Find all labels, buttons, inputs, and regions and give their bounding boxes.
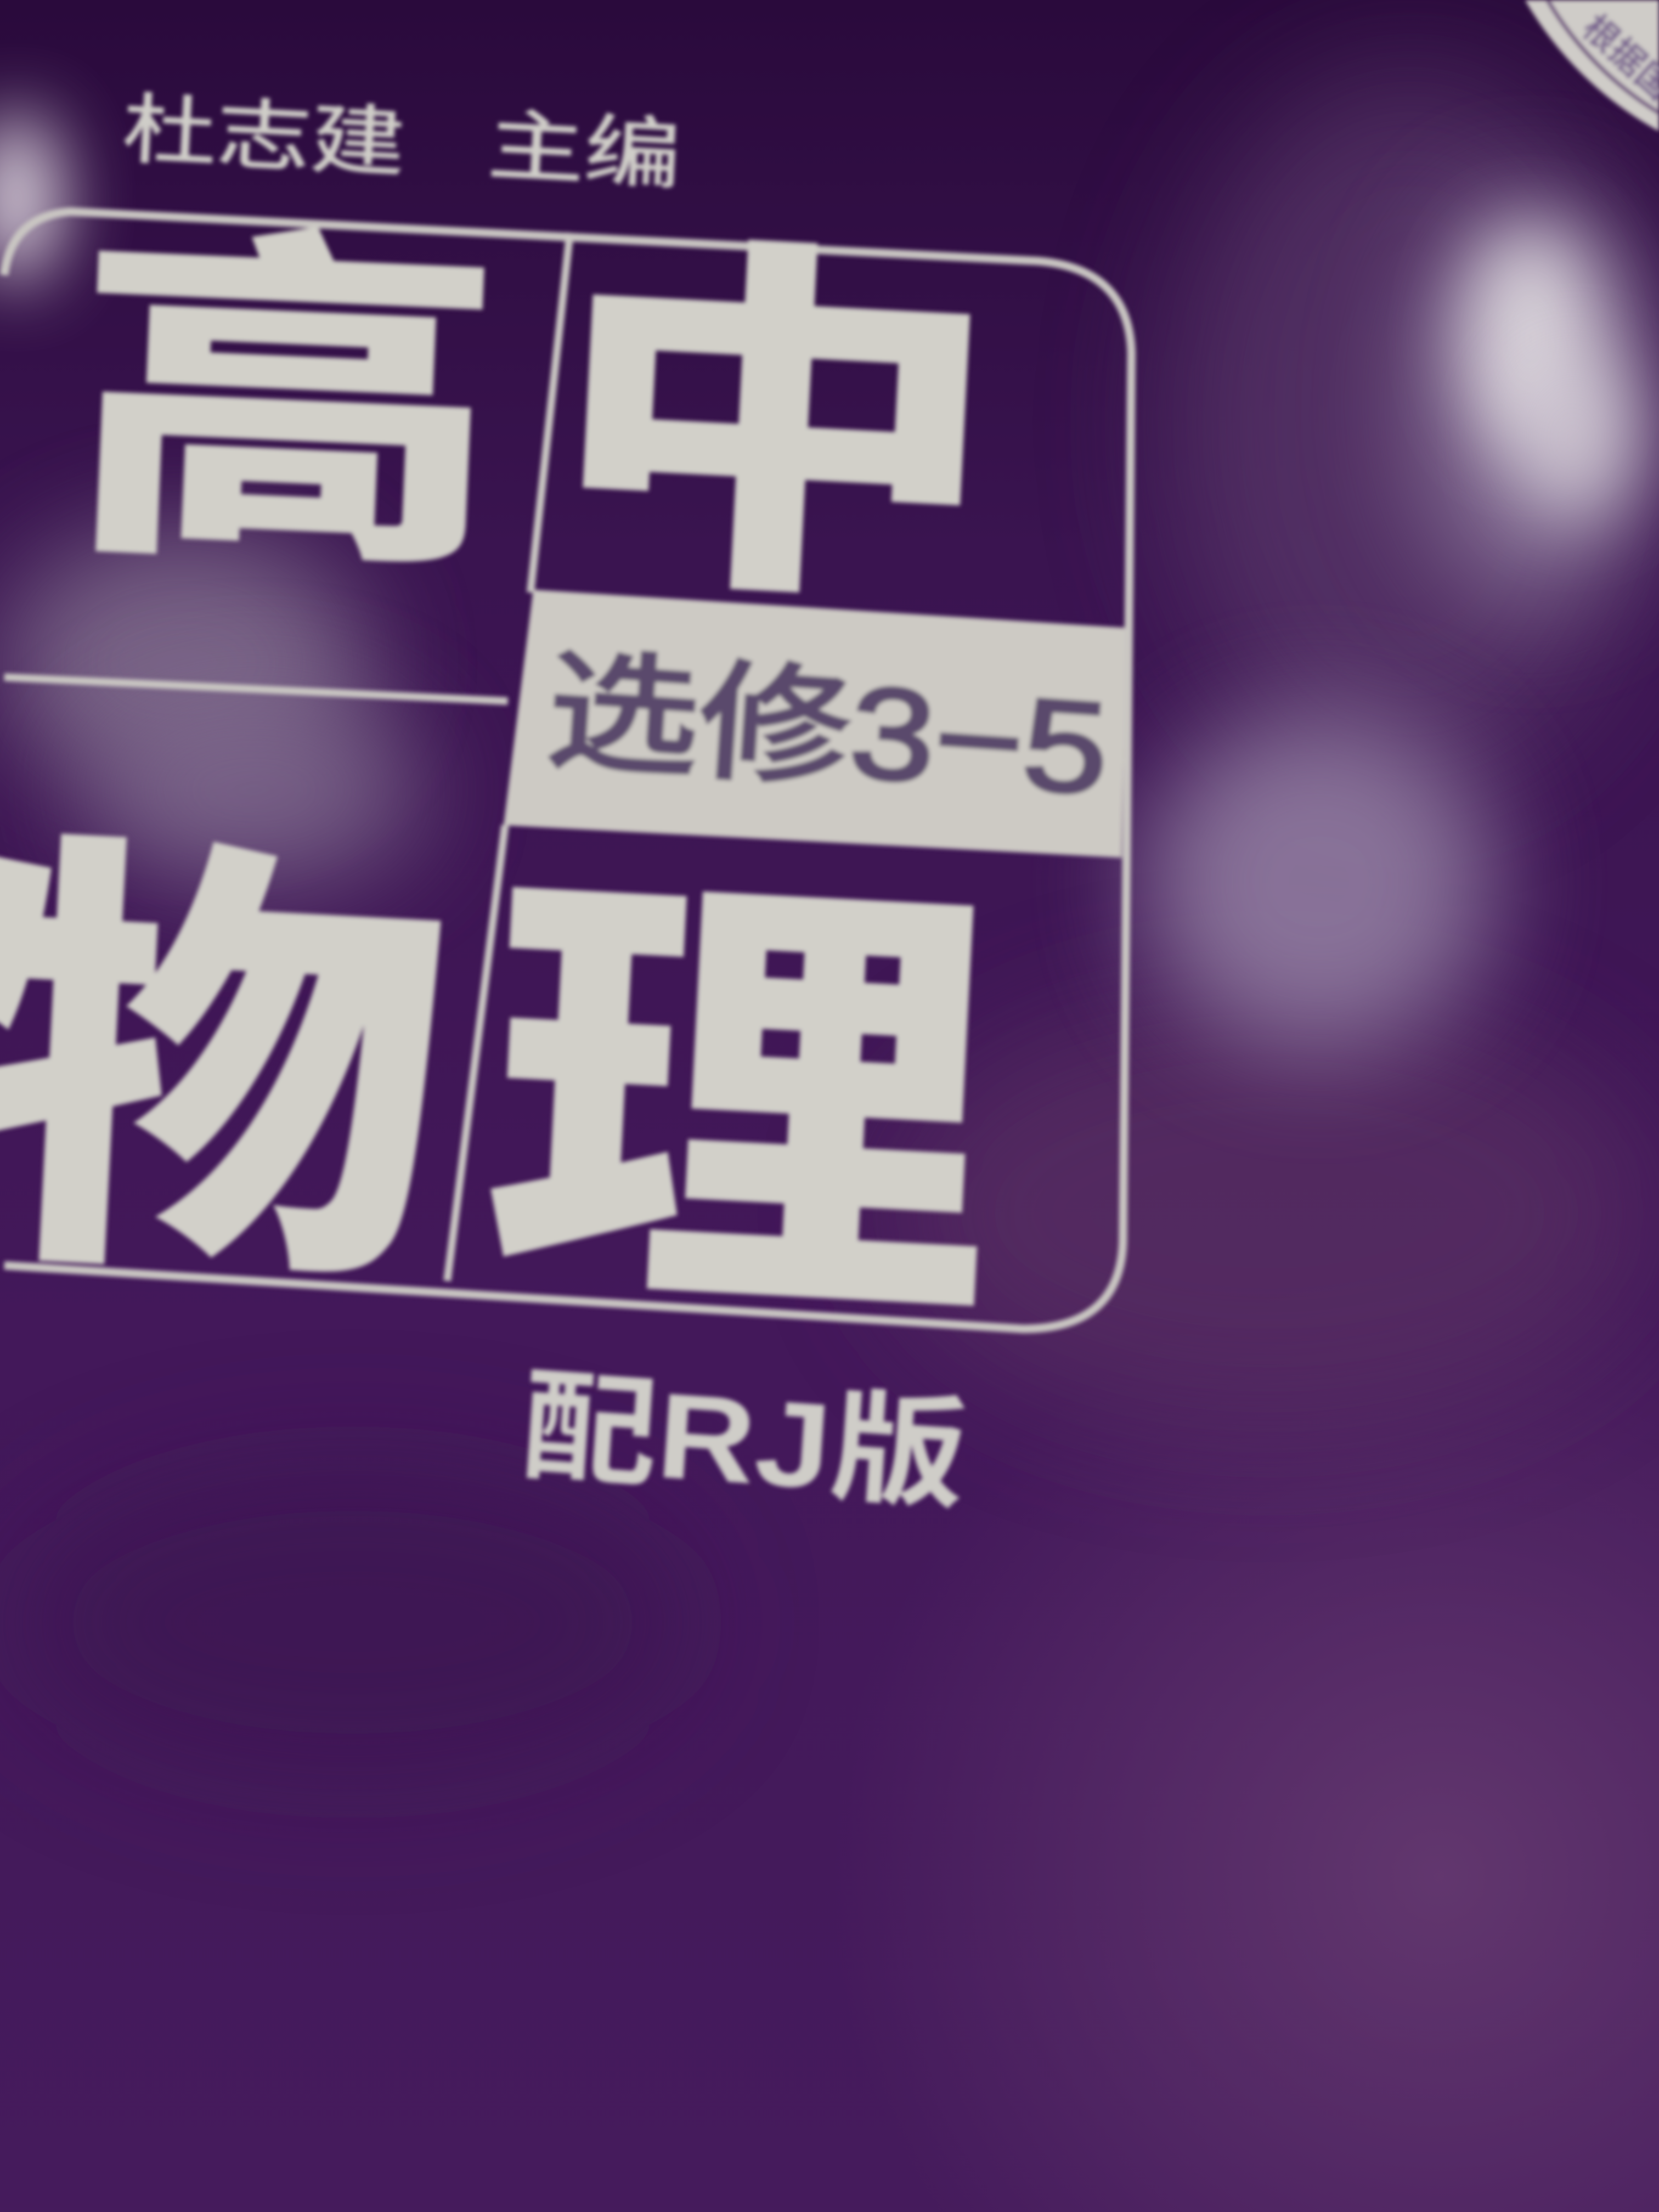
subtitle text: 选修3−5 bbox=[543, 637, 1113, 821]
panel dividers bbox=[4, 233, 570, 1281]
seal badge at top right bbox=[1525, 0, 1659, 131]
glare: top right bbox=[1410, 198, 1651, 607]
panel border bbox=[4, 212, 1131, 1329]
authors line: 主编 bbox=[486, 101, 684, 199]
authors line: 杜志建 bbox=[121, 86, 407, 187]
subtitle band bbox=[504, 590, 1126, 857]
glare: centre right bbox=[1143, 713, 1496, 1051]
authors line bbox=[121, 86, 684, 199]
title character: gao: 高 bbox=[61, 202, 511, 610]
glare: left side bbox=[0, 113, 423, 889]
title character: li: 理 bbox=[473, 840, 1008, 1374]
title character: zhong: 中 bbox=[538, 211, 1010, 646]
title panel bbox=[0, 202, 1131, 1374]
edition label: 配RJ版 bbox=[517, 1357, 971, 1524]
